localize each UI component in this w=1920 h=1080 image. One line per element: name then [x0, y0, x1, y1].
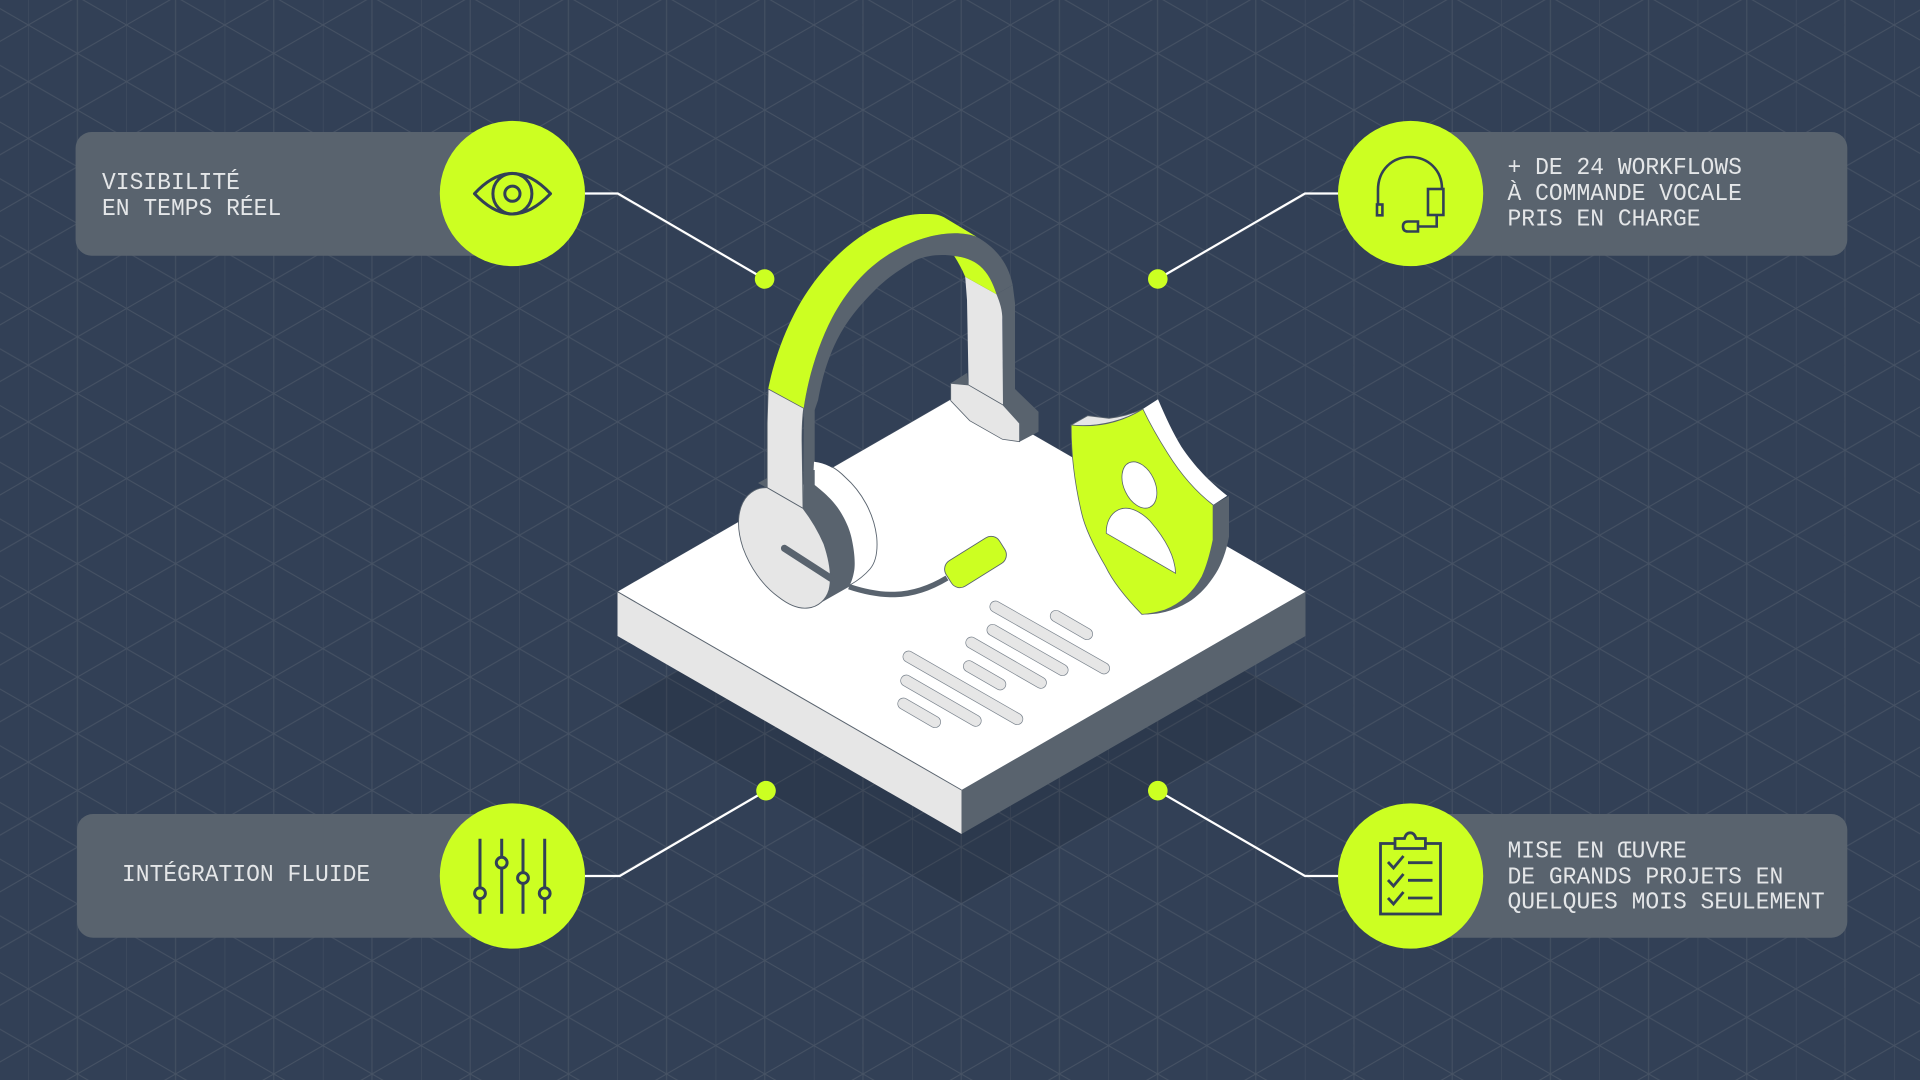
panel: large projects: [1338, 803, 1847, 949]
text: voice workflows: À COMMANDE VOCALE: [1508, 179, 1742, 208]
panel: smooth integration: [77, 803, 585, 949]
icon: sliders: [475, 839, 550, 914]
microphone boom on disc: [784, 548, 831, 578]
shield rim: [1143, 399, 1227, 505]
far strap and base: [951, 256, 1038, 442]
shield person body: [1106, 508, 1176, 573]
panel: voice workflows: [1338, 121, 1847, 266]
text: large projects: MISE EN ŒUVRE: [1508, 838, 1687, 866]
icon: checklist clipboard: [1380, 833, 1440, 914]
microphone arm: [849, 578, 947, 595]
ear cup disc: [739, 488, 830, 608]
document text lines: [903, 607, 1104, 722]
connector: top right: [1148, 194, 1338, 289]
text: large projects: [1508, 838, 1825, 917]
ear cushion: [812, 462, 877, 585]
text: large projects: DE GRANDS PROJETS EN: [1508, 864, 1783, 892]
isometric platform: [618, 393, 1306, 834]
text: large projects: QUELQUES MOIS SEULEMENT: [1508, 889, 1825, 917]
microphone capsule: [941, 533, 1010, 591]
text: real-time visibility: [102, 168, 281, 223]
connector: top left: [585, 194, 774, 289]
shield person head: [1115, 456, 1164, 514]
shield face: [1071, 409, 1213, 614]
headband underside: [803, 233, 1013, 508]
text: voice workflows: [1508, 154, 1742, 234]
headband: [767, 214, 976, 508]
icon: eye: [474, 173, 550, 214]
shield illustration: [1071, 399, 1229, 614]
ear cup side: [758, 470, 855, 603]
headset illustration: [739, 214, 1038, 608]
icon: headset: [1377, 157, 1443, 232]
text: real-time visibility: VISIBILITÉ: [102, 168, 240, 197]
text: real-time visibility: EN TEMPS RÉEL: [102, 194, 281, 223]
platform right face: [962, 592, 1306, 834]
text: smooth integration: INTÉGRATION FLUIDE: [122, 860, 370, 889]
text: voice workflows: + DE 24 WORKFLOWS: [1508, 154, 1742, 182]
connector: bottom left: [585, 781, 776, 876]
text: voice workflows: PRIS EN CHARGE: [1508, 206, 1701, 234]
platform top face: [618, 393, 1306, 790]
panel: real-time visibility: [76, 121, 585, 266]
connector: bottom right: [1148, 781, 1338, 876]
platform left face: [618, 592, 962, 834]
platform shadow: [618, 507, 1306, 903]
shield side: [1142, 496, 1229, 614]
